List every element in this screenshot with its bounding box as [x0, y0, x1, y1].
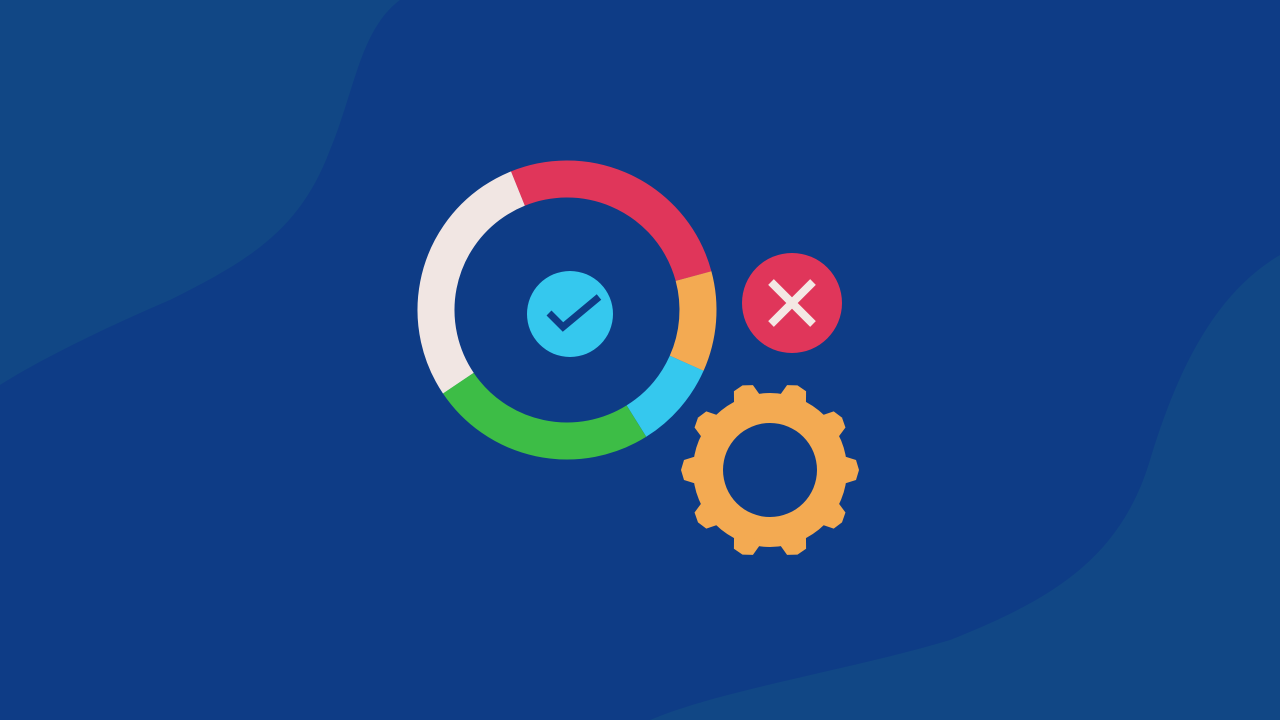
- donut chart: [385, 128, 749, 492]
- icon: gear: [681, 381, 859, 559]
- icon: x circle: [742, 253, 842, 353]
- icon: check circle: [527, 271, 613, 357]
